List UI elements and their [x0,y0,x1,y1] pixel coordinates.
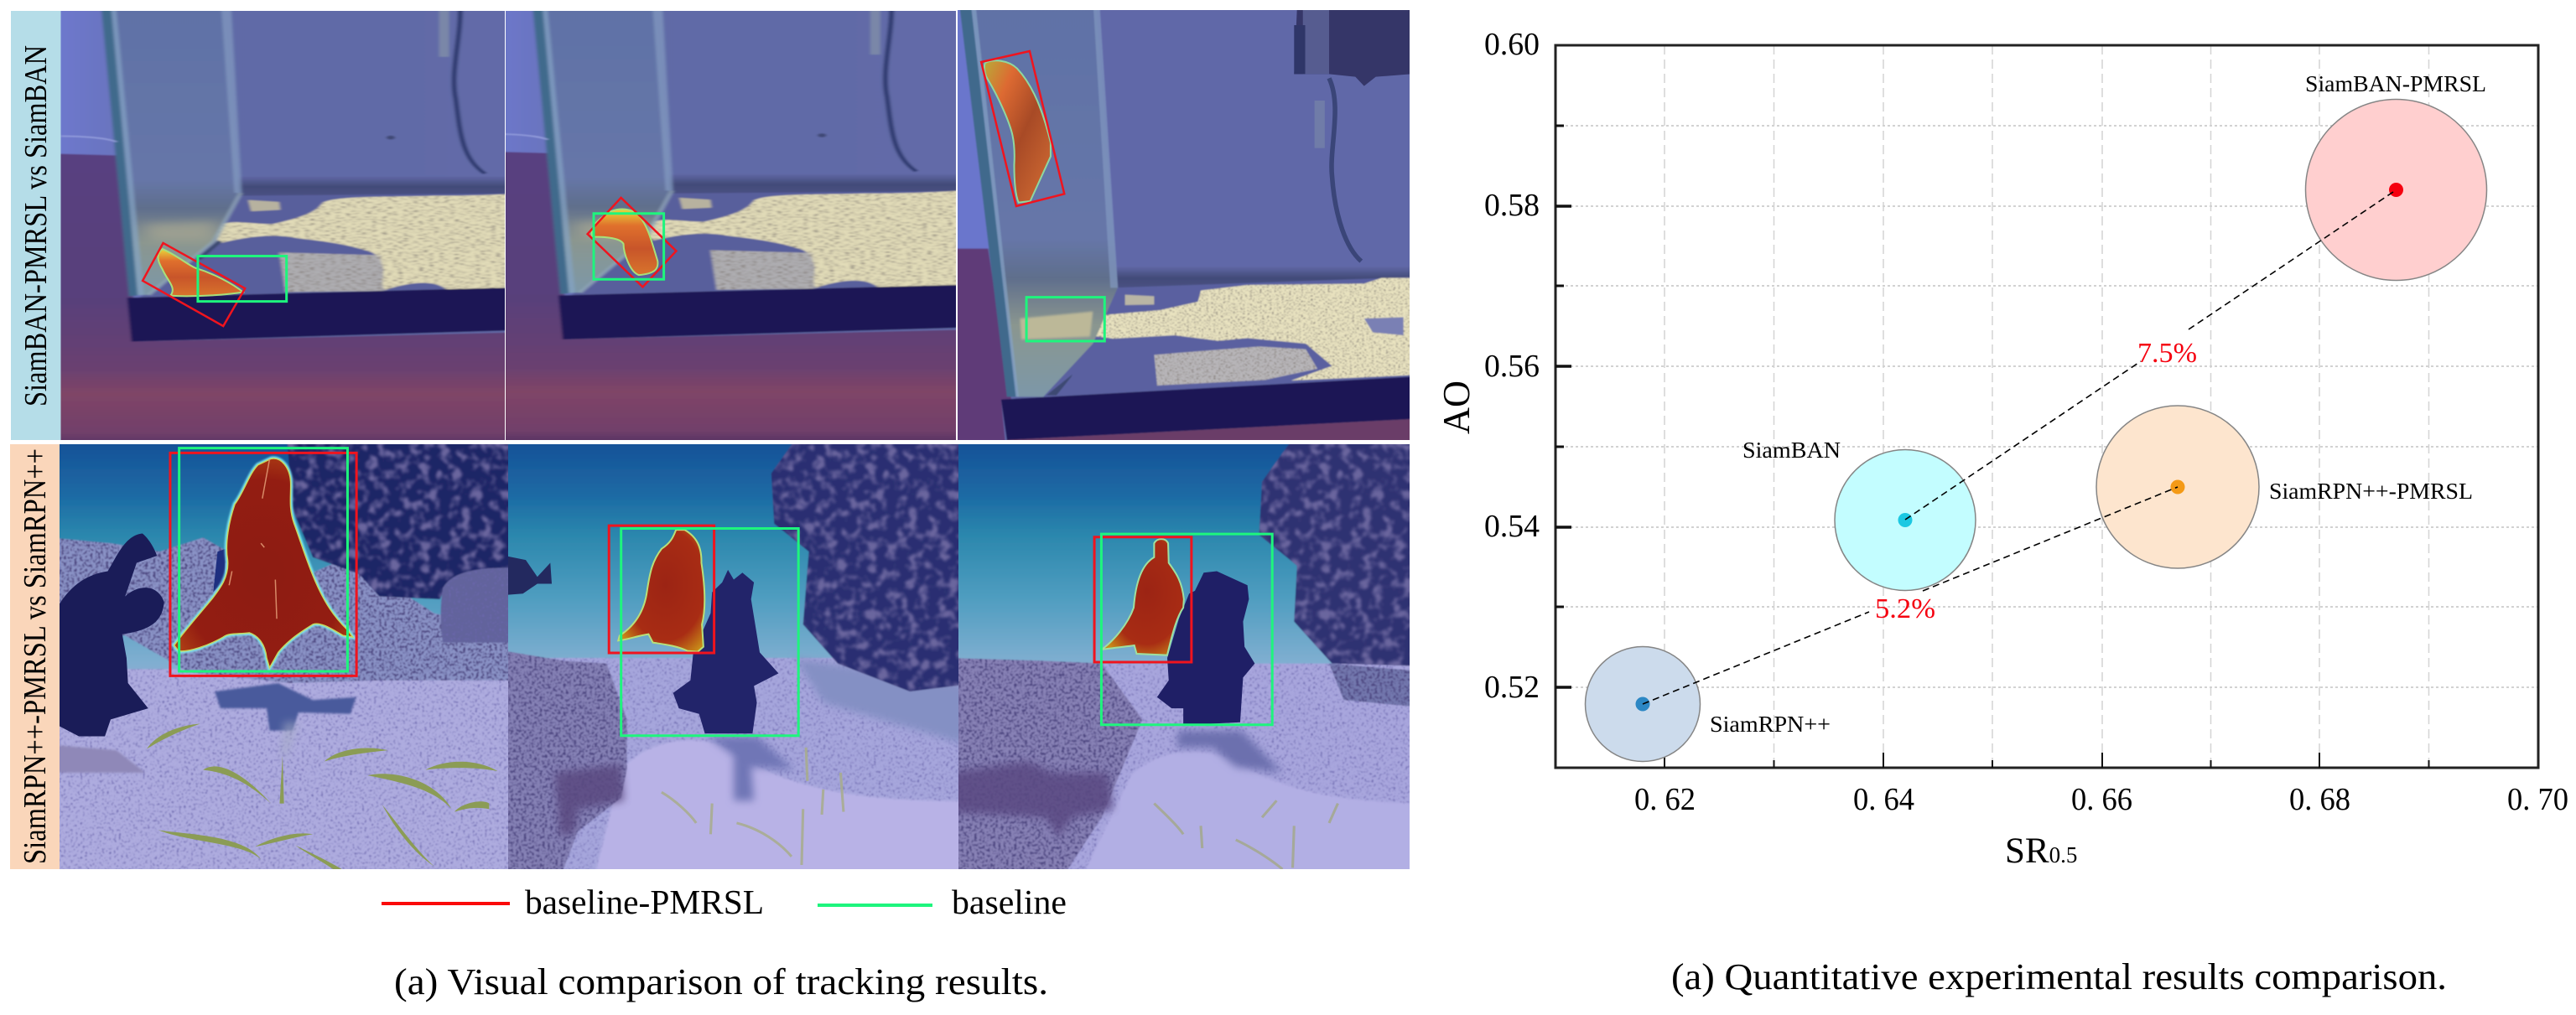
red box baseline-PMRSL [588,198,676,287]
label SiamBAN: SiamBAN [1742,437,1841,463]
black distractor object [1157,572,1254,725]
green box baseline [198,256,287,302]
red box baseline-PMRSL [609,526,714,653]
green box baseline [621,528,798,736]
y axis tick labels: 0.56 [1484,349,1540,384]
aquarium filter device [1294,8,1410,148]
x axis tick labels: 0. 64 [1853,782,1914,817]
label SiamRPN++: SiamRPN++ [1710,711,1831,737]
y axis tick labels: 0.60 [1484,27,1540,62]
row label: SiamBAN-PMRSL vs SiamBAN [11,11,60,440]
y axis tick labels: 0.58 [1484,188,1540,223]
seagrass [1154,800,1337,869]
caption left: (a) Visual comparison of tracking results. [394,961,1048,1002]
photo: sea frame 3 [958,444,1410,869]
photo: sea frame 2 [508,444,958,869]
photo: sea frame 1 [60,444,508,869]
x axis tick labels: 0. 66 [2071,782,2132,817]
label SiamRPN++-PMRSL: SiamRPN++-PMRSL [2269,478,2473,504]
dashed arrow SiamRPN++ to SiamRPN++-PMRSL [1643,487,2178,704]
bubble: SiamBAN-PMRSL [2306,99,2487,280]
green box baseline [1026,298,1104,341]
chart grid [1555,45,2538,768]
target segmentation [1102,539,1184,655]
x axis tick labels: 0. 68 [2289,782,2350,817]
photo: tank frame 1 [60,11,505,440]
red box baseline-PMRSL [981,51,1064,206]
left fish [506,556,552,595]
legend key: baseline-PMRSL [382,883,764,921]
chart axes frame and ticks [1555,45,2538,768]
bubble: SiamBAN [1835,449,1976,590]
rubble field [497,650,627,884]
legend key: baseline: baseline [952,883,1067,921]
bubble: SiamRPN++-PMRSL [2096,406,2259,568]
legend [382,883,1067,921]
red box baseline-PMRSL [170,453,356,676]
red box baseline-PMRSL [143,243,245,326]
photo: tank frame 3 [958,10,1410,440]
legend key: baseline [818,883,1067,921]
green box baseline [1101,534,1272,725]
row label: SiamRPN++-PMRSL vs SiamRPN++: SiamRPN++-PMRSL vs SiamRPN++ [18,448,53,864]
target segmentation [618,530,704,652]
target segmentation [174,458,353,668]
dark coral backdrop [771,437,976,691]
y axis tick labels: 0.54 [1484,509,1540,544]
panel: bubble chart AO vs SR0.5 [1435,27,2568,997]
label SiamBAN-PMRSL: SiamBAN-PMRSL [2305,70,2486,96]
x axis tick labels: 0. 70 [2507,782,2568,817]
seagrass [662,748,844,865]
bubble: SiamRPN++ [1585,647,1701,761]
shadow [1177,731,1282,773]
improvement label 5.2%: 5.2% [1875,593,1935,624]
green box baseline [179,448,347,671]
y axis title: AO [1435,381,1478,434]
rubble field [947,658,1142,884]
y axis tick labels [1484,27,1540,705]
dark coral backdrop [287,437,527,599]
red box baseline-PMRSL [1094,537,1192,662]
dark coral backdrop [1259,437,1431,666]
x axis title: SR0.5 [2005,831,2077,871]
photo: tank frame 2 [506,11,956,440]
target fish segmentation [592,210,657,275]
target fish segmentation [984,60,1051,203]
legend key: baseline-PMRSL: baseline-PMRSL [525,883,764,921]
shadow [708,736,794,800]
x axis tick labels: 0. 62 [1634,782,1696,817]
dashed arrow SiamBAN to SiamBAN-PMRSL [1905,190,2396,520]
y axis tick labels: 0.52 [1484,670,1540,705]
caption right: (a) Quantitative experimental results comparison. [1671,956,2447,997]
green box baseline [594,214,664,279]
black distractor object [673,570,778,733]
panel: visual comparison of tracking results [10,0,1431,1002]
black distractor object [57,533,164,736]
seagrass [147,723,498,869]
row label: SiamRPN++-PMRSL vs SiamRPN++ [10,444,60,869]
improvement label 7.5%: 7.5% [2137,338,2197,369]
x axis tick labels [1634,782,2568,817]
shadow under the target [215,683,356,731]
target fish segmentation [158,249,243,296]
